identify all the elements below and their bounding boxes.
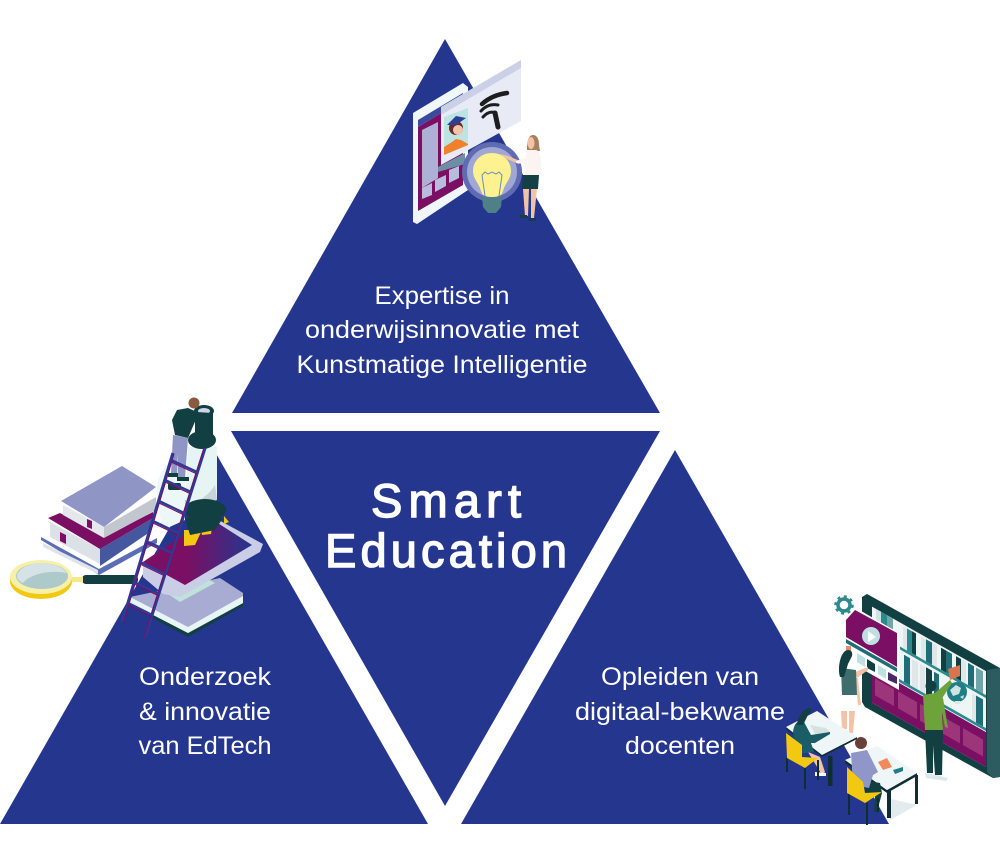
icon: tablet [413,83,468,224]
text: onderzoek: Onderzoek [139,663,272,691]
heading: Smart Education: Smart [371,474,521,527]
text: opleiden [575,663,785,760]
text: expertise: Kunstmatige Intelligentie [296,351,588,379]
icon: light bulb with halo [462,142,522,213]
figure: woman presenting [500,135,541,221]
text: onderzoek: van EdTech [138,732,272,760]
triangle: centre [231,431,660,806]
panel: floating wifi screen [441,60,521,165]
triangle: left [0,450,428,824]
figure: man in green sweater [923,665,960,781]
figure: man at desk [845,737,918,825]
triangle: top [232,39,660,413]
panel: digital bookshelf screen [862,594,1000,778]
illustration: tablet, wifi and light bulb [413,60,541,224]
text: expertise [296,282,588,379]
figure: woman at desk [786,708,857,789]
text: opleiden: docenten [625,732,735,760]
icon: gear [836,596,852,614]
heading: Smart Education: Education [325,524,567,577]
heading: Smart Education [325,474,567,577]
icon: magnifying glass [10,560,138,599]
text: expertise: onderwijsinnovatie met [305,316,579,344]
text: onderzoek [138,663,272,760]
text: expertise: Expertise in [374,282,510,310]
text: onderzoek: & innovatie [139,698,271,726]
illustration: classroom with digital bookshelf [786,594,1000,825]
panel: floating video card [846,608,899,690]
icon: microscope [130,405,263,637]
icon: ladder [122,448,205,637]
triangle: right [461,450,889,824]
illustration: microscope, books and magnifier [10,398,263,637]
figure: woman at screen [839,646,868,733]
figure: man on ladder [168,398,212,490]
icon: stack of books [41,466,157,575]
icon: wifi [481,93,507,127]
text: opleiden: digitaal-bekwame [575,698,785,726]
text: opleiden: Opleiden van [601,663,759,691]
